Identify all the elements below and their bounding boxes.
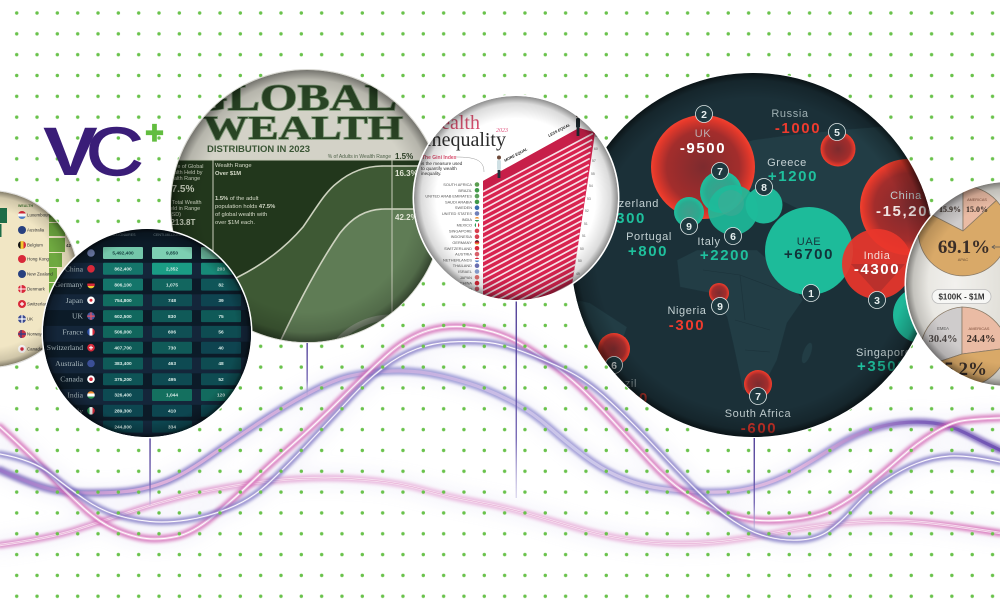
rank badges: 1 (808, 288, 814, 300)
bar values: 63 (595, 134, 599, 138)
table row: India (67, 389, 241, 401)
pie labels: over $1M: 15.0% (966, 205, 988, 214)
bar values (576, 134, 599, 276)
table row: Switzerland: 730 (168, 345, 176, 351)
table row: USA: 5,492,400 (112, 251, 134, 257)
table row: UK (72, 310, 241, 322)
pie labels: $100K - $1M: EMEA (937, 326, 949, 331)
map land masses (576, 126, 926, 390)
bar values: 51 (584, 222, 588, 226)
table row: UK: 830 (168, 314, 176, 320)
bubble: India: -4300 (854, 261, 900, 278)
table row: UK: UK (72, 312, 84, 321)
table row: Switzerland: 40 (218, 345, 224, 351)
country list: SINGAPORE (449, 228, 472, 233)
logo: VC+: V (43, 113, 98, 190)
table row: Netherlands: 244,800 (114, 424, 132, 430)
rank badges: 2 (701, 109, 707, 121)
table row: Germany: 1,075 (166, 282, 178, 288)
Gini definition: is the measure used (421, 161, 463, 166)
wave: magenta ribbon (0, 326, 1000, 539)
table row: Germany: 82 (218, 282, 224, 288)
table row: Canada: 375,200 (114, 377, 132, 383)
wealth range description: over $1M each. (215, 220, 255, 226)
flags and country names: Norway (27, 332, 43, 336)
pie labels: over $1M: 69.1% (938, 237, 990, 258)
table row: Australia: 463 (168, 361, 176, 367)
table row: Switzerland (47, 342, 241, 354)
panel: regional pie charts lens (900, 175, 1000, 395)
label: Greece: +1200 (768, 168, 818, 185)
heading: Wealth Inequality: Inequality (425, 129, 506, 151)
green header boxes (0, 208, 7, 237)
left column stats: Share of Global (166, 164, 203, 170)
bar values: 50 (578, 259, 582, 263)
pie labels: $100K - $1M: 24.4% (967, 334, 995, 345)
panel: world map lens (573, 73, 931, 438)
pill: $100K - $1M: $100K - $1M (938, 292, 985, 302)
left column stats: $213.8T (166, 218, 195, 227)
table row: China: 2,352 (166, 266, 178, 272)
table row: Canada (60, 373, 241, 385)
table row: China: China (65, 264, 84, 273)
panel: millionaires table lens (40, 225, 255, 440)
country list (425, 182, 473, 291)
column header: % of Adults in Wealth Range (328, 154, 391, 160)
panel: left ranking lens (0, 190, 76, 368)
table row: UK: 602,500 (114, 314, 132, 320)
flags and country names: Canada (27, 346, 43, 352)
flags and country names: Luxembourg (27, 212, 52, 218)
label: Switzerland: Switzerland (596, 198, 659, 210)
pie: over $1M by region (918, 186, 1000, 276)
table row: France: 56 (218, 330, 224, 336)
bubble: India: India (864, 250, 891, 262)
table row: USA (87, 247, 241, 259)
table row: Australia: 48 (218, 361, 224, 367)
bubble: UK: UK (695, 128, 711, 140)
pie labels: over $1M: 15.9% (939, 205, 961, 214)
connector lines (149, 300, 755, 531)
table row: Italy: Italy (69, 406, 83, 415)
label: Italy: Italy (697, 236, 721, 248)
label: Portugal (627, 232, 671, 256)
bar values: 55 (591, 172, 595, 176)
heading: Global Wealth: GLOBAL (190, 78, 397, 119)
rank badges (606, 106, 886, 404)
Gini definition: inequality. (421, 171, 441, 176)
bar values: 50 (580, 247, 584, 251)
bubble: Nigeria (667, 283, 729, 334)
label: Portugal: Portugal (626, 231, 672, 243)
pie labels: over $1M: APAC (958, 257, 968, 262)
table row: India: India (67, 390, 84, 400)
table row: China: 862,400 (114, 266, 132, 272)
country list: INDIA (462, 217, 472, 222)
bubble: Singapore: +3500 (857, 358, 907, 375)
chart: isometric red bars (482, 128, 595, 300)
logo: VC+: C (86, 113, 143, 190)
bubble: Nigeria: -300 (669, 317, 705, 334)
flag markers (475, 182, 479, 291)
column values (395, 170, 416, 220)
flags and country names: New Zealand (27, 272, 53, 276)
logo: VC+: + (145, 114, 164, 150)
rank badges: 7 (755, 391, 761, 403)
bubble: UAE: UAE (797, 236, 821, 248)
pie labels: $100K - $1M: 45.2% (935, 359, 987, 380)
table row: Germany: 806,100 (114, 282, 132, 288)
table row: China (65, 263, 241, 275)
flowing wave ribbons (0, 326, 1000, 545)
left column stats: Wealth Range (166, 176, 200, 182)
country list: POLAND (456, 286, 472, 291)
wave: violet ribbon (0, 342, 1000, 540)
country list: SAUDI ARABIA (445, 199, 472, 204)
column header (328, 153, 413, 159)
table header: CENTI-MILLIONAIRES (153, 233, 191, 237)
pie labels: $100K - $1M (929, 326, 995, 380)
country list: AUSTRIA (455, 252, 472, 257)
Gini definition (421, 155, 463, 176)
wealth range description: Over $1M (215, 171, 241, 177)
bubble: Russia: -1000 (775, 120, 821, 137)
bubble: Brazil: Brazil (606, 378, 637, 390)
bubble: South Africa: -600 (741, 420, 777, 437)
bar values: 60 (594, 147, 598, 151)
bubble: UK: -9500 (680, 140, 726, 157)
wave: light pink ribbon (0, 478, 1000, 545)
wealth range description (215, 163, 275, 226)
wave halo (0, 326, 1000, 545)
rank badges: 5 (834, 127, 840, 139)
wealth range description: population holds 47.5% (215, 204, 275, 210)
country list: CHINA (460, 281, 472, 286)
label: Greece (768, 158, 816, 181)
panel: global wealth distribution lens (170, 69, 433, 343)
table row: India: 120 (217, 393, 225, 399)
table row: Canada: Canada (60, 375, 84, 384)
label: Italy (698, 237, 748, 260)
wealth range description: Wealth Range (215, 163, 252, 169)
rank badges: 9 (717, 301, 723, 313)
bubble: South Africa (725, 370, 792, 437)
bar values: 52 (585, 209, 589, 213)
wealth range description: 1.5% of the adult (215, 196, 259, 202)
left column stats: Wealth Held by (166, 170, 203, 176)
pie labels: $100K - $1M: AMERICAS (969, 326, 990, 331)
country list: SWITZERLAND (444, 246, 472, 251)
heading: Global Wealth: WEALTH (203, 110, 403, 147)
bar values: 53 (587, 197, 591, 201)
label: Italy: +2200 (700, 247, 750, 264)
pie labels: over $1M: AMERICAS (967, 198, 987, 202)
heading: Wealth Inequality: Wealth (424, 112, 480, 134)
table row: Switzerland: Switzerland (47, 343, 83, 352)
table row: USA: 9,850 (166, 251, 178, 257)
bubble: Singapore (856, 292, 918, 371)
column heading: WEALTH (18, 204, 34, 208)
table row: Canada: 495 (168, 377, 176, 383)
table header: BILLIONAIRES (209, 233, 234, 237)
bubble: Singapore: Singapore (856, 347, 912, 359)
flags and country names: Australia (27, 228, 45, 232)
country list: NETHERLANDS (443, 257, 472, 262)
table row: Netherlands (103, 421, 192, 433)
bubble: China (860, 159, 930, 255)
rank badges: 3 (874, 295, 880, 307)
bubble: UAE (765, 207, 853, 295)
table row: Australia (55, 358, 241, 370)
bubble: Russia: Russia (771, 108, 809, 120)
bubble: UAE: +6700 (784, 246, 834, 263)
bar values: 49 (576, 272, 580, 276)
rank badges: 6 (730, 231, 736, 243)
left column stats: of Total Wealth (166, 200, 201, 206)
bubble: South Africa: South Africa (725, 408, 792, 420)
bubble: Brazil (598, 333, 647, 402)
country list: GERMANY (452, 240, 472, 245)
table row: UK: 75 (218, 314, 224, 320)
table row: Italy: 410 (168, 408, 176, 414)
chart: dark panel and wealth curves (171, 160, 432, 342)
pill: $100K - $1M (932, 290, 991, 304)
column values: 42.2% (395, 213, 418, 222)
country list: UNITED ARAB EMIRATES (425, 194, 472, 199)
table row: Japan: 748 (168, 298, 176, 304)
country list: BRAZIL (458, 188, 473, 193)
flags and country names: Switzerland (27, 302, 50, 306)
flags and country names: UK (27, 316, 33, 322)
bubbles: Europe cluster (674, 171, 782, 235)
bubble: Nigeria: Nigeria (667, 305, 707, 317)
table row: Australia: Australia (55, 359, 84, 368)
heading: Wealth Inequality (428, 115, 508, 150)
wave: blue ribbon (0, 371, 1000, 493)
table row: Japan: Japan (66, 296, 83, 305)
label: Portugal: +800 (628, 243, 668, 260)
country list: ISRAEL (458, 269, 473, 274)
heading: Global Wealth (202, 84, 404, 140)
wealth range description: of global wealth with (215, 212, 267, 218)
table row: Canada: 52 (218, 377, 224, 383)
bubble: China: China (890, 190, 922, 202)
table row: France: 606 (168, 330, 176, 336)
bubble: Russia (771, 108, 856, 166)
table header (110, 233, 234, 237)
rank badges: 9 (686, 221, 692, 233)
pie labels: over $1M (938, 198, 990, 262)
pie labels: $100K - $1M: 30.4% (929, 334, 957, 345)
row bands (40, 263, 255, 436)
label: Switzerland: +300 (606, 210, 646, 227)
Gini definition: The Gini Index (422, 155, 457, 161)
rank badges: 8 (761, 182, 767, 194)
axis annotations: LESS EQUAL (548, 123, 571, 138)
table row: France: France (62, 327, 84, 336)
table row: France: 506,000 (114, 330, 132, 336)
flags and country names: Belgium (27, 242, 43, 248)
table row: Italy (69, 405, 241, 417)
pie: $100K - $1M by region (920, 307, 1000, 387)
bubble: Brazil: -700 (613, 390, 649, 407)
table row: India: 326,400 (114, 393, 132, 399)
figure: person on low bar (497, 156, 501, 178)
left column stats: 47.5% (166, 184, 194, 195)
bubble: UK (651, 115, 755, 219)
rank badges: 7 (717, 166, 723, 178)
table row: Switzerland: 407,700 (114, 345, 132, 351)
table row: Japan: 39 (218, 298, 224, 304)
figure: person on high bar (576, 114, 580, 136)
left column stats: (USD) (166, 212, 181, 218)
country list: THAILAND (453, 263, 472, 268)
left column stats (171, 164, 204, 225)
left column stats: Held in Range (166, 206, 200, 212)
country list: INDONESIA (451, 234, 472, 239)
country list: UNITED STATES (442, 211, 472, 216)
table row: Japan: 754,800 (114, 298, 132, 304)
table row: France (62, 326, 241, 338)
panel: wealth inequality lens (412, 94, 620, 302)
table row: China: 203 (217, 266, 225, 272)
table header: MILLIONAIRES (110, 233, 136, 237)
table row: Australia: 383,400 (114, 361, 132, 367)
country list: JAPAN (460, 275, 472, 280)
country list: MEXICO (457, 223, 472, 228)
logo: VC+ (43, 113, 164, 190)
table row: India: 1,044 (166, 393, 178, 399)
table row: Japan (66, 294, 241, 306)
flags and country names: Hong Kong (27, 256, 50, 262)
Gini definition: to quantify wealth (421, 166, 457, 171)
column values: 16.3% (395, 169, 418, 178)
table row: Netherlands: 334 (168, 424, 176, 430)
label: Switzerland (616, 199, 658, 223)
bubble: India (842, 229, 912, 299)
table row: USA: 735 (217, 251, 225, 257)
axis annotations (504, 123, 571, 163)
axis annotations: MORE EQUAL (504, 147, 529, 163)
heading: Wealth Inequality: 2023 (496, 128, 508, 134)
bar values: 54 (589, 184, 593, 188)
rank badges: 6 (611, 360, 617, 372)
country list: SOUTH AFRICA (443, 182, 472, 187)
table row: Germany (55, 279, 241, 291)
bar values: 51 (582, 234, 586, 238)
column header: 1.5% (395, 152, 413, 161)
label: Greece: Greece (767, 157, 807, 169)
subheading: DISTRIBUTION IN 2023 (207, 144, 310, 155)
bar values: 57 (592, 159, 596, 163)
bars (49, 212, 65, 296)
table row: Germany: Germany (55, 280, 83, 289)
arrow (992, 245, 1000, 249)
bubble: China: -15,200 (876, 203, 938, 220)
table row: Italy: 289,300 (114, 408, 132, 414)
country list: SWEDEN (455, 205, 472, 210)
flags and country names (18, 211, 53, 353)
flags and country names: Denmark (27, 286, 46, 292)
bar value: 42% (66, 243, 75, 248)
